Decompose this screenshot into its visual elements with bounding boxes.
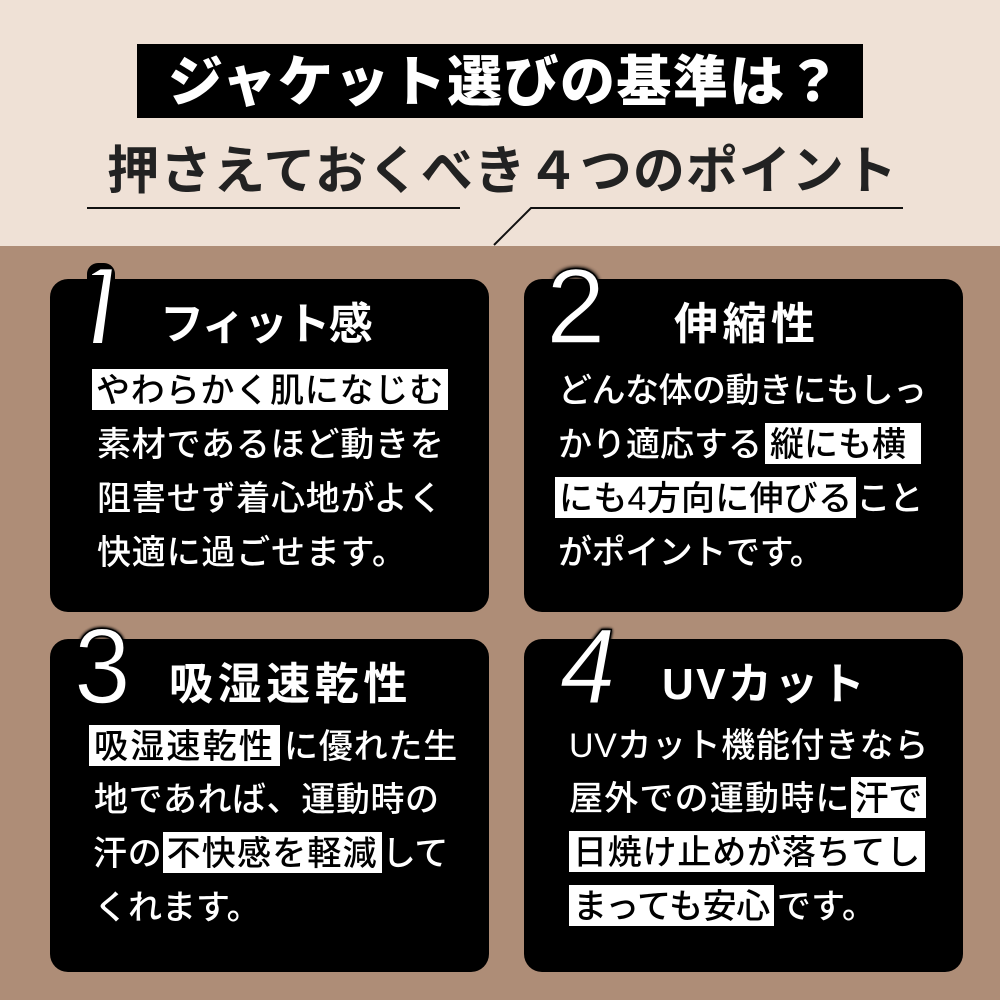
body text: moisture: 吸湿速乾性 [94, 728, 275, 766]
number 1: 1 [61, 246, 137, 366]
title banner: ジャケット選びの基準は？ [168, 51, 842, 113]
body text: stretch: かり適応する [558, 426, 762, 464]
heading: moisture: 吸湿速乾性 [169, 660, 412, 709]
body text: moisture [89, 725, 458, 927]
number 2: 2 [546, 246, 606, 366]
panel: stretch [524, 279, 963, 612]
body text: stretch [555, 372, 926, 572]
body text: stretch: にも4方向に伸びる [559, 480, 852, 518]
speech-line underline [87, 207, 903, 246]
heading: stretch: 伸縮性 [674, 300, 820, 349]
body text: fit: 素材であるほど動きを [97, 426, 445, 464]
subtitle: 押さえておくべき４つのポイント [107, 143, 898, 201]
body text: moisture: 地であれば、運動時の [94, 781, 440, 819]
body text: moisture: くれます。 [94, 889, 261, 927]
body text: fit [92, 369, 448, 572]
body text: fit: 阻害せず着心地がよく [97, 480, 443, 518]
body text: uv: です。 [777, 888, 876, 926]
body text: fit: やわらかく肌になじむ [96, 372, 444, 410]
header background [0, 0, 1000, 246]
body text: stretch: こと [856, 480, 922, 518]
heading: uv: UVカット [662, 660, 867, 709]
number 1 [87, 263, 115, 343]
body text: uv: 汗で [855, 780, 922, 818]
body text: moisture: に優れた生 [284, 728, 458, 766]
number 4: 4 [560, 606, 615, 726]
heading: fit: フィット感 [160, 300, 371, 349]
panel: uv [524, 639, 963, 972]
body text: fit: 快適に過ごせます。 [97, 534, 407, 572]
body text: moisture: 不快感を軽減 [167, 835, 378, 873]
panel: fit [50, 279, 489, 612]
number 3: 3 [74, 606, 131, 726]
body text: uv: 日焼け止めが落ちてし [573, 834, 921, 872]
body text: moisture: 汗の して [93, 835, 448, 873]
body text: uv: 屋外での運動時に [569, 780, 851, 818]
panel: moisture [50, 639, 489, 972]
body text: stretch: がポイントです。 [558, 534, 823, 572]
body text: uv: UVカット機能付きなら [569, 727, 929, 765]
body text: stretch: 縦にも横 [770, 426, 906, 464]
body text: uv: まっても安心 [573, 888, 770, 926]
body text: stretch: どんな体の動きにもしっ [558, 372, 926, 410]
body text: uv [569, 727, 929, 926]
